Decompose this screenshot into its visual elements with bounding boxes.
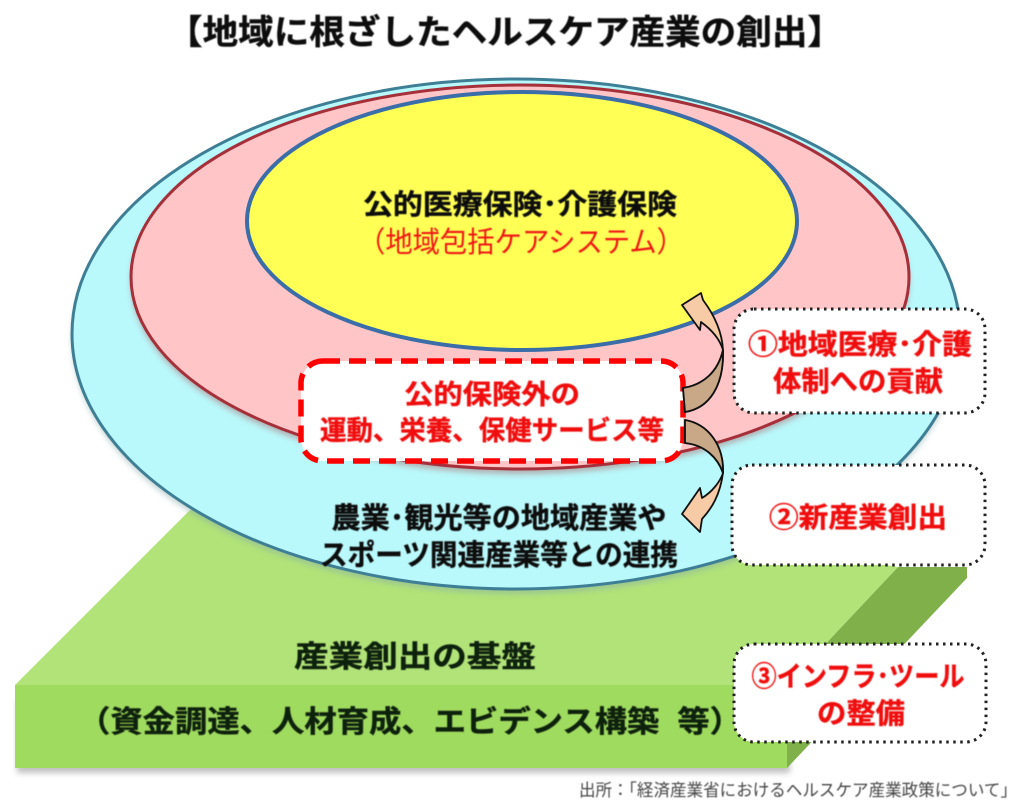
foundation detail text: （資金調達、人材育成、エビデンス構築 等）	[78, 705, 742, 739]
public insurance text: 公的医療保険･介護保険	[363, 189, 677, 220]
inner ellipse: public insurance: （地域包括ケアシステム）	[358, 226, 684, 259]
arrow: downward curved	[682, 420, 723, 532]
callout 1: regional care contribution: ①地域医療･介護	[748, 329, 972, 360]
outer ellipse: regional industry collaboration: スポーツ関連産業等との連携	[320, 539, 678, 572]
dashed callout: non-public services	[301, 361, 683, 461]
outer ellipse: regional industry collaboration	[72, 79, 960, 594]
dashed callout: non-public services: 運動、栄養、保健サービス等	[320, 416, 664, 446]
title: 【地域に根ざしたヘルスケア産業の創出】	[167, 13, 843, 52]
callout 3: infrastructure and tools: ③インフラ･ツール	[752, 661, 964, 692]
dashed callout: non-public services: 公的保険外の	[404, 380, 580, 410]
inner ellipse: public insurance	[247, 92, 797, 350]
foundation heading: 産業創出の基盤	[294, 641, 536, 674]
callout 2: new industry creation	[732, 465, 985, 565]
source note: 出所：「経済産業省におけるヘルスケア産業政策について」	[579, 781, 1017, 800]
green foundation platform	[15, 500, 967, 773]
callout 1: regional care contribution	[734, 309, 985, 413]
arrow: upward curved	[682, 293, 723, 412]
callout 1: regional care contribution: 体制への貢献	[773, 366, 943, 397]
callout 3: infrastructure and tools: の整備	[817, 698, 905, 729]
callout 2: new industry creation: ②新産業創出	[769, 502, 947, 533]
collaboration text: 農業･観光等の地域産業や	[332, 502, 666, 535]
callout 3: infrastructure and tools	[734, 644, 986, 742]
middle ellipse: non-public insurance services	[131, 85, 909, 474]
